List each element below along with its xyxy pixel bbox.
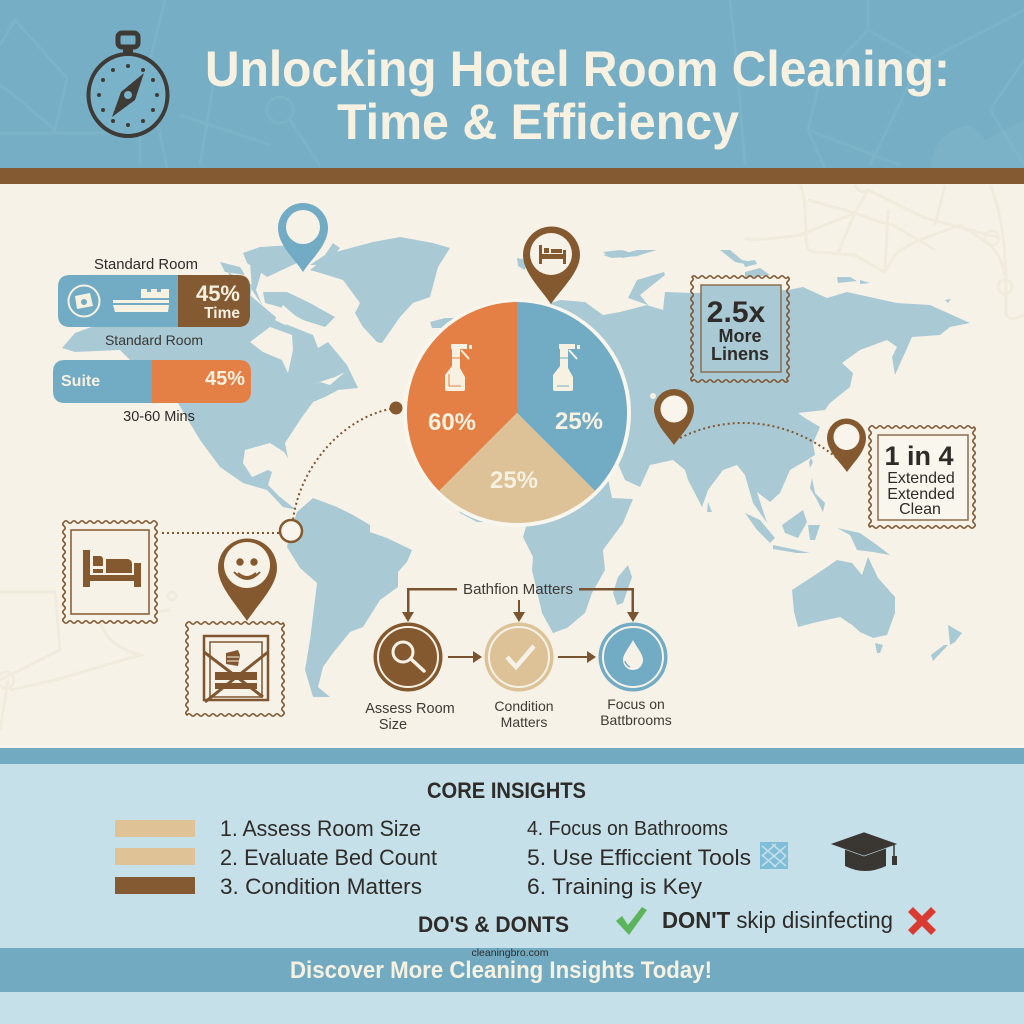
insights list: 2. Evaluate Bed Count [220, 845, 438, 870]
route marker ring [280, 520, 302, 542]
africa [440, 440, 633, 633]
stamp: one in four [869, 426, 975, 528]
stamp: one in four: Clean [899, 501, 941, 518]
stamp: no bed [186, 622, 284, 716]
step: focus on bathrooms: Battbrooms [600, 712, 672, 728]
greenland [310, 237, 450, 343]
icon: stopwatch [88, 33, 168, 136]
icon: cleaning cloth [760, 842, 788, 869]
footer call to action: Discover More Cleaning Insights Today! [290, 957, 712, 984]
icon: small bed [539, 245, 566, 264]
insights list: 4. Focus on Bathrooms [527, 818, 728, 840]
insights list: 5. Use Efficcient Tools [527, 845, 751, 870]
flow heading: Bathfion Matters [463, 581, 573, 598]
heading: do's and donts: DO'S & DONTS [418, 912, 569, 937]
pie chart: 25% [490, 467, 538, 494]
chart: standard room bar [58, 256, 250, 327]
legend swatches [115, 820, 195, 894]
faint street map line art [0, 185, 1024, 730]
flow arrows [402, 588, 639, 663]
north america [62, 295, 358, 510]
route dot [390, 402, 402, 414]
australia and oceania [792, 557, 895, 638]
icon: bed [83, 550, 141, 587]
eurasia [500, 287, 970, 523]
stamp: more linens: More [718, 326, 762, 346]
label: time range: 30-60 Mins [123, 409, 195, 425]
icon: check [616, 907, 647, 935]
stamp: one in four: Extended [887, 486, 955, 503]
insights list: 3. Condition Matters [220, 874, 422, 899]
title: Unlocking Hotel Room Cleaning: [205, 41, 950, 97]
chart: suite bar: Suite [61, 373, 100, 390]
title [205, 41, 950, 150]
south america [287, 498, 412, 697]
step: condition matters [484, 622, 554, 730]
label: standard room: Standard Room [105, 332, 203, 348]
chart: standard room bar: 45% [196, 281, 240, 306]
dont text: DON'T skip disinfecting [662, 907, 893, 933]
header band [0, 0, 1024, 168]
step: assess room size [365, 622, 455, 733]
insights list: 6. Training is Key [527, 874, 703, 899]
chart: suite bar: 45% [205, 368, 245, 390]
footer band [0, 948, 1024, 992]
stamp: more linens: Linens [711, 344, 769, 364]
icon: spray bottle right [553, 344, 580, 391]
chart: standard room bar: Time [204, 305, 240, 322]
step: assess room size: Size [379, 717, 407, 733]
icon: bar glyph [68, 286, 169, 316]
insights list [220, 816, 751, 899]
step: condition matters: Matters [501, 714, 547, 730]
stamp: one in four: 1 in 4 [884, 441, 954, 471]
lower panel background [0, 748, 1024, 1024]
pin: blue marker [278, 203, 328, 272]
pin: right brown marker [827, 418, 866, 472]
dotted route: left pie link [293, 408, 396, 520]
northern islands [620, 250, 657, 258]
step: condition matters: Condition [494, 698, 554, 714]
world map [62, 237, 970, 697]
dotted route: stamp to marker [162, 532, 280, 534]
dotted route: asia [680, 423, 837, 458]
arctic islands [243, 245, 297, 277]
madagascar [613, 565, 632, 605]
title: Time & Efficiency [337, 94, 739, 150]
pie chart [403, 299, 631, 527]
step: focus on bathrooms [598, 622, 672, 728]
icon: spray bottle left [445, 344, 472, 391]
stamp: bed [63, 521, 157, 623]
process flow [365, 581, 672, 733]
pin: left brown marker [654, 389, 694, 445]
step: focus on bathrooms: Focus on [607, 696, 665, 712]
stamp: more linens: 2.5x [707, 296, 766, 329]
icon: graduation cap [830, 832, 898, 871]
stamp: one in four: Extended [887, 470, 955, 487]
stamp: more linens [691, 276, 789, 382]
step: assess room size: Assess Room [365, 701, 455, 717]
pin: smiley marker [218, 538, 277, 621]
heading: core insights: CORE INSIGHTS [427, 778, 586, 803]
brown divider bar [0, 168, 1024, 184]
pin: bed marker [523, 226, 580, 304]
insights list: 1. Assess Room Size [220, 816, 421, 841]
icon: red cross [908, 907, 936, 935]
cream water cut-outs [200, 305, 656, 466]
site credit: cleaningbro.com [471, 947, 549, 959]
chart: suite bar [53, 360, 251, 403]
chart: standard room bar: Standard Room [94, 256, 198, 273]
pie chart: 60% [428, 409, 476, 436]
pie chart: 25% [555, 408, 603, 435]
